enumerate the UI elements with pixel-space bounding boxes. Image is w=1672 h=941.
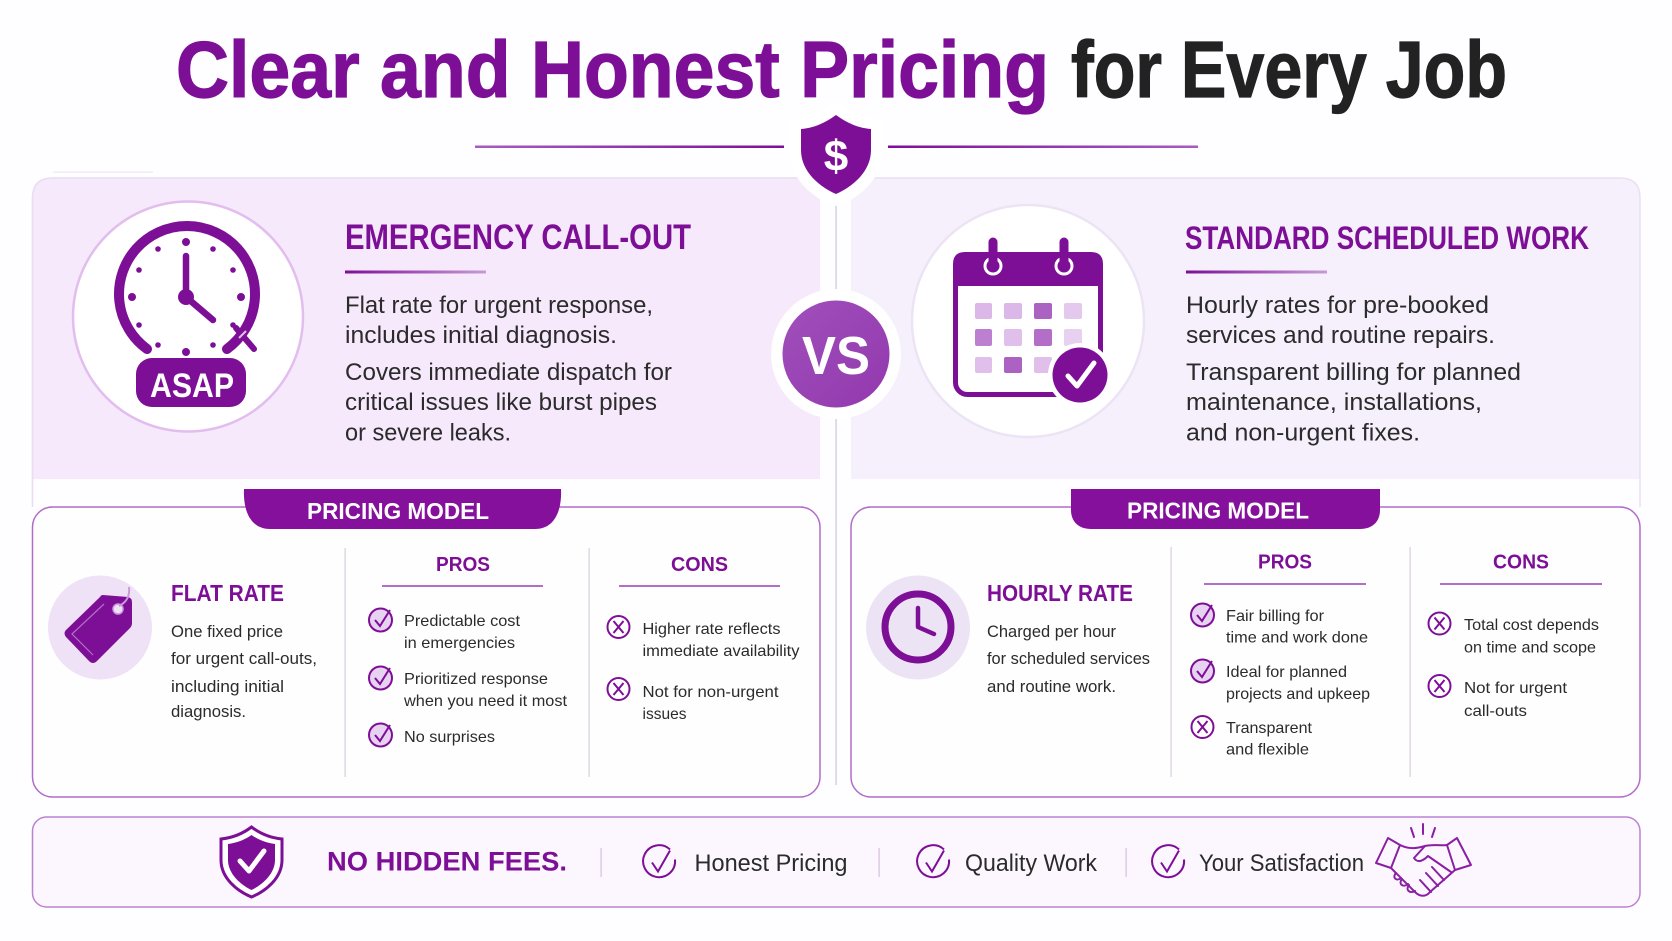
pro item: No surprises xyxy=(404,729,495,746)
con item xyxy=(642,621,800,660)
icon: check xyxy=(1191,660,1214,682)
pro item: Predictable cost xyxy=(404,613,521,630)
con item: Total cost depends xyxy=(1464,617,1599,634)
icon: calendar xyxy=(912,205,1144,437)
text: hourly rate: HOURLY RATE xyxy=(987,580,1133,606)
heading underline xyxy=(345,270,486,274)
heading: emergency call-out: EMERGENCY CALL-OUT xyxy=(345,218,691,257)
heading underline xyxy=(1186,270,1327,274)
con item: Not for non-urgent xyxy=(642,684,779,701)
text: standard description xyxy=(1186,292,1521,446)
text: no hidden fees: NO HIDDEN FEES. xyxy=(327,846,567,876)
text: flat rate: diagnosis. xyxy=(171,703,246,721)
icon: check xyxy=(917,845,949,877)
con item: Not for urgent xyxy=(1464,680,1568,697)
cons column: CONS xyxy=(1493,552,1549,574)
con item: immediate availability xyxy=(642,643,800,660)
title: Clear and Honest Pricing xyxy=(176,25,1049,114)
text: emergency description: Flat rate for urgent response, xyxy=(345,292,653,319)
pro item: projects and upkeep xyxy=(1226,686,1370,703)
text: quality work: Quality Work xyxy=(965,850,1098,877)
icon: check xyxy=(1191,604,1214,626)
faint decorative line xyxy=(53,172,153,173)
con item xyxy=(1464,617,1599,656)
text: emergency description: includes initial diagnosis. xyxy=(345,322,617,349)
text: your satisfaction: Your Satisfaction xyxy=(1199,850,1364,877)
pro item xyxy=(1226,720,1313,758)
text: hourly rate: Charged per hour xyxy=(987,623,1116,641)
text: flat rate: One fixed price xyxy=(171,623,283,641)
text: flat rate xyxy=(171,580,317,721)
pros column: PROS xyxy=(1258,552,1312,574)
text: hourly rate xyxy=(987,580,1150,696)
pro item: Ideal for planned xyxy=(1226,664,1347,681)
title rule left xyxy=(475,146,784,148)
text: emergency description xyxy=(345,292,672,446)
pros column: PROS xyxy=(436,554,490,576)
panel: emergency call-out xyxy=(32,178,820,507)
pro item xyxy=(404,613,521,652)
text: standard description: and non-urgent fixes. xyxy=(1186,420,1420,446)
icon: cross xyxy=(608,616,630,638)
icon: cross xyxy=(1428,675,1450,697)
tab: pricing model xyxy=(1071,489,1380,529)
pro item: when you need it most xyxy=(403,693,568,710)
pro item xyxy=(1226,664,1370,703)
cons column xyxy=(1428,552,1602,720)
pro item: Transparent xyxy=(1226,720,1313,737)
pro item: time and work done xyxy=(1226,630,1368,646)
icon: ASAP clock: ASAP xyxy=(150,367,234,405)
panel: standard scheduled work xyxy=(851,178,1640,507)
icon: price tag xyxy=(48,576,152,680)
icon: check xyxy=(643,845,675,877)
text: hourly rate: for scheduled services xyxy=(987,650,1150,668)
heading: standard scheduled work: STANDARD SCHEDULED WORK xyxy=(1185,220,1589,256)
title rule right xyxy=(888,146,1198,148)
center divider xyxy=(835,205,837,785)
con item: issues xyxy=(642,706,686,723)
con item xyxy=(1464,680,1568,720)
tab: pricing model xyxy=(244,489,561,529)
text: standard description: Hourly rates for pre-booked xyxy=(1186,292,1489,319)
cons column xyxy=(608,554,800,723)
panel: hourly rate pricing model xyxy=(851,489,1640,797)
text: standard description: services and routine repairs. xyxy=(1186,322,1495,349)
icon: clock xyxy=(866,576,970,680)
icon: check xyxy=(369,608,392,632)
cons column: CONS xyxy=(671,554,728,576)
pro item xyxy=(1226,608,1368,646)
pros column xyxy=(1191,552,1370,758)
pro item: Prioritized response xyxy=(404,671,548,688)
con item: on time and scope xyxy=(1464,640,1596,656)
footer banner xyxy=(32,817,1640,907)
VS badge xyxy=(771,289,901,419)
icon: handshake xyxy=(1376,824,1471,896)
icon: cross xyxy=(608,678,630,700)
text: hourly rate: and routine work. xyxy=(987,678,1116,696)
icon: cross xyxy=(1428,612,1450,634)
icon: ASAP clock xyxy=(73,202,303,432)
icon: shield with dollar: $ xyxy=(824,132,848,181)
text: honest pricing: Honest Pricing xyxy=(694,850,848,877)
pros column xyxy=(369,554,568,746)
icon: check xyxy=(369,724,392,746)
panel: flat rate pricing model xyxy=(32,489,820,797)
title: for Every Job xyxy=(1071,25,1507,114)
text: emergency description: critical issues like burst pipes xyxy=(345,389,657,416)
text: flat rate: FLAT RATE xyxy=(171,580,284,606)
con item: Higher rate reflects xyxy=(642,621,780,638)
text: standard description: Transparent billing for planned xyxy=(1186,359,1521,386)
text: emergency description: Covers immediate dispatch for xyxy=(345,359,672,386)
con item xyxy=(642,684,779,723)
text: standard description: maintenance, installations, xyxy=(1186,389,1482,416)
text: emergency description: or severe leaks. xyxy=(345,420,511,446)
icon: cross xyxy=(1192,716,1214,738)
pro item xyxy=(403,671,568,710)
con item: call-outs xyxy=(1464,703,1527,720)
tab: pricing model: PRICING MODEL xyxy=(1127,498,1309,524)
icon: shield check xyxy=(221,827,282,897)
text: flat rate: including initial xyxy=(171,678,284,696)
pro item: in emergencies xyxy=(404,635,515,652)
text: flat rate: for urgent call-outs, xyxy=(171,650,317,668)
icon: check xyxy=(369,666,392,690)
pro item: Fair billing for xyxy=(1226,608,1325,625)
pro item: and flexible xyxy=(1226,742,1309,758)
tab: pricing model: PRICING MODEL xyxy=(307,498,489,524)
icon: shield with dollar xyxy=(801,115,871,194)
VS badge: VS xyxy=(802,326,870,386)
icon: check xyxy=(1152,845,1184,877)
